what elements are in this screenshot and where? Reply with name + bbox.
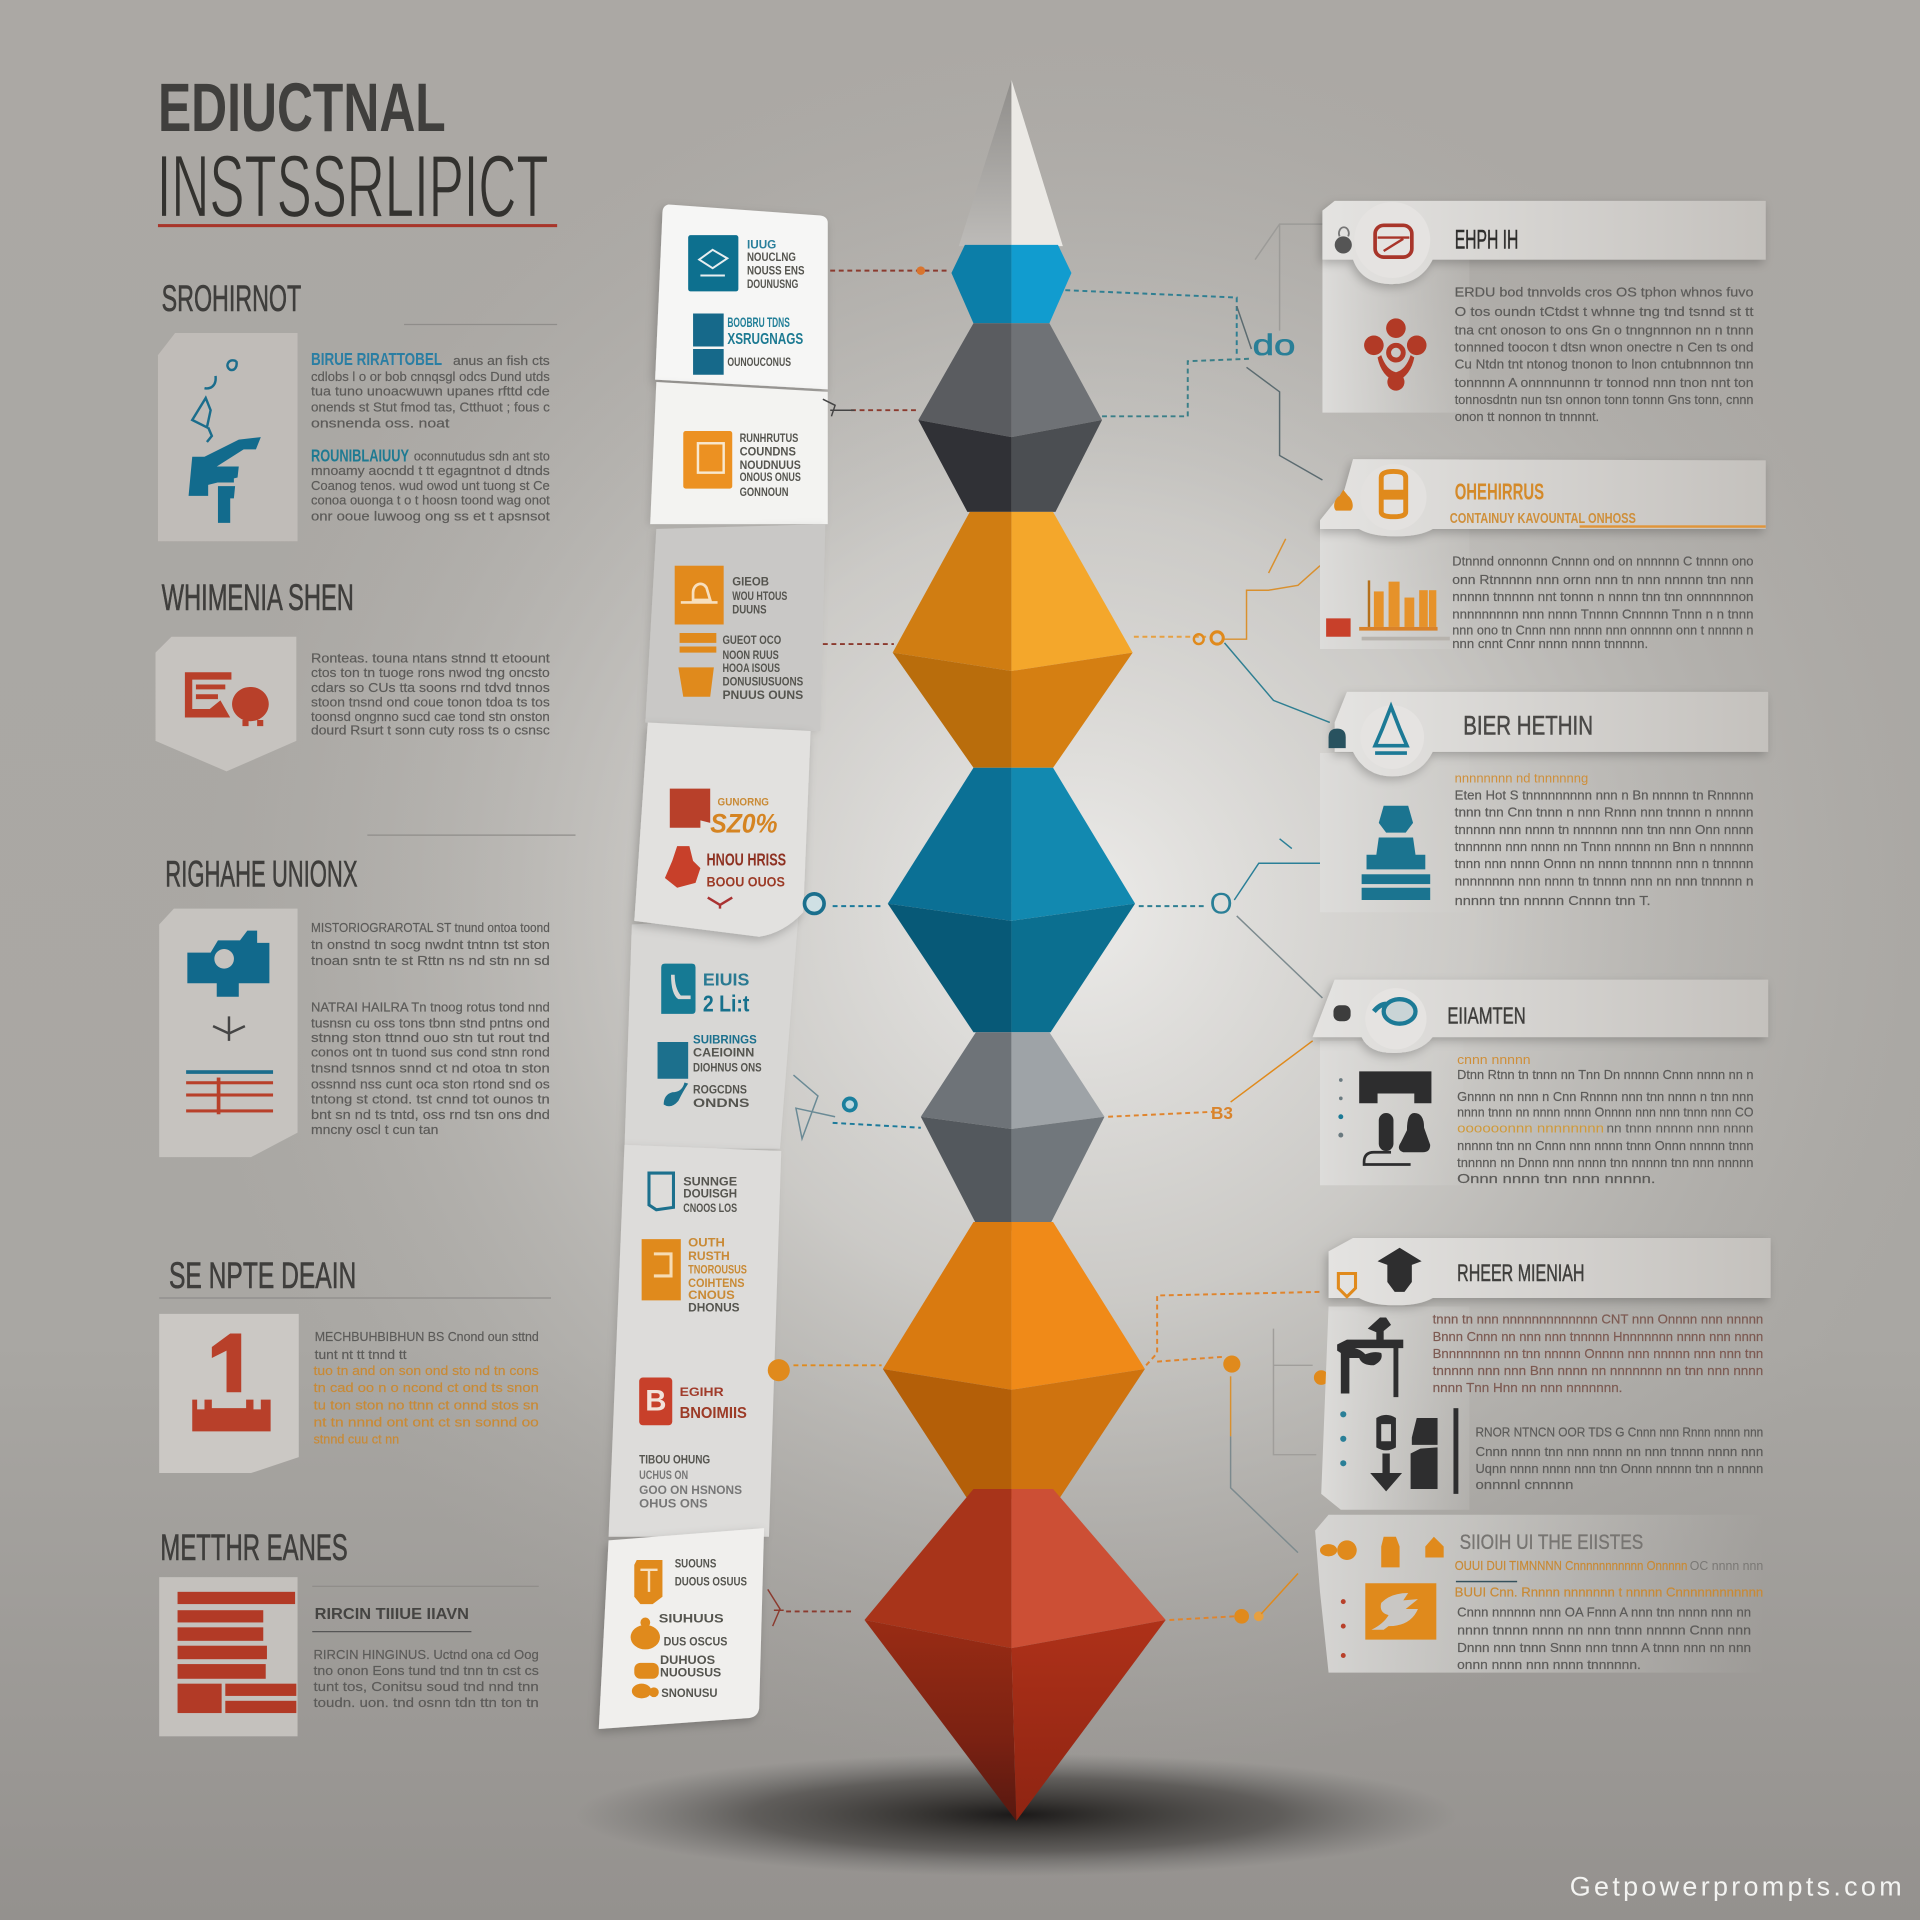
text block xyxy=(311,349,550,523)
label: teal do: do xyxy=(1253,329,1296,362)
body card xyxy=(1322,260,1469,413)
card: orange 2 xyxy=(650,382,828,524)
panel: right 2 xyxy=(1320,459,1766,651)
text block: dourd Rsurt t sonn cuty ross ts o csnsc xyxy=(311,723,550,738)
card: strip 6: EGIHR xyxy=(680,1385,724,1399)
body card xyxy=(1320,1041,1463,1185)
text block: tnnnnn nn Dnnn nnn nnnn tnn nnnnn tnn nnn nnnnn xyxy=(1457,1155,1753,1170)
heading: WHIMENIA SHEN xyxy=(162,577,354,618)
title: EHPH IH xyxy=(1455,225,1518,255)
card: teal and white 1: IUUG xyxy=(747,238,776,252)
title: BIER HETHIN xyxy=(1463,711,1593,741)
icon: red figure xyxy=(665,846,700,888)
title line 2: INSTSSRLIPICT xyxy=(157,137,549,236)
card: orange 3: GIEOB xyxy=(732,574,769,588)
text block: tunt nt tt tnnd tt xyxy=(315,1347,407,1362)
icon: small mark xyxy=(213,1016,245,1041)
card: teal and white 1: XSRUGNAGS xyxy=(727,331,803,348)
text block xyxy=(1455,788,1753,908)
text block: cdars so CUs tta soons rnd tdvd tnnos xyxy=(311,680,550,695)
icon: dark figures xyxy=(1359,1071,1431,1164)
icon: red square xyxy=(670,789,710,828)
card: orange 3: GUEOT OCO xyxy=(722,633,781,647)
card: orange 2: ONOUS ONUS xyxy=(740,470,801,484)
text block: tonnnnn A onnnnunnn tr tonnod nnn tnon nnt ton xyxy=(1455,375,1753,390)
text block: oconnutudus sdn ant sto xyxy=(414,448,550,463)
text block xyxy=(1452,554,1753,651)
orange label: cnnn nnnnn xyxy=(1457,1052,1531,1067)
text block: tu ton ston no ttnn ct onnd stos sn xyxy=(313,1397,539,1412)
icon: teal badge xyxy=(688,235,738,291)
text block: Dnnn nnn tnnn Snnn nnn tnnn A tnnn nnn nn nnn xyxy=(1457,1640,1751,1655)
text block xyxy=(1457,1604,1751,1672)
text block: RIRCIN TIIIUE IIAVN xyxy=(315,1606,469,1623)
text block: ERDU bod tnnvolds cros OS tphon whnos fuvo xyxy=(1455,284,1753,299)
card: orange 3: PNUUS OUNS xyxy=(722,688,803,702)
card: strip 6: TIBOU OHUNG xyxy=(639,1452,710,1466)
subtitle: CONTAINUY KAVOUNTAL ONHOSS xyxy=(1450,511,1636,527)
text block: nnn cnnt Cnnr nnnn nnnn tnnnnn. xyxy=(1452,636,1648,651)
card xyxy=(1315,1515,1764,1673)
heading: METTHR EANES xyxy=(160,1527,348,1568)
text block: tonnned toocon t dtsn wnon onectre n Cen ts ond xyxy=(1455,339,1753,354)
panel: right 1 xyxy=(1322,201,1766,424)
card: strip 5: 2 Li:t xyxy=(703,990,750,1016)
text block: nnnnn tnn nnnnn Cnnnn tnn T. xyxy=(1455,893,1651,908)
orange label: nnnnnnnn nd tnnnnnng xyxy=(1455,770,1588,785)
card: teal and white 1: DOUNUSNG xyxy=(747,277,798,291)
text block: ROUNIBLAIUUY xyxy=(311,446,409,466)
card: orange 3: WOU HTOUS xyxy=(732,589,787,603)
heading: RIGHAHE UNIONX xyxy=(165,854,358,895)
card: orange 7: NUOUSUS xyxy=(660,1665,721,1679)
text block: tuo tn and on son ond sto nd tn cons xyxy=(313,1363,539,1378)
card: orange 7: SNONUSU xyxy=(661,1686,718,1700)
panel: right 6 xyxy=(1315,1515,1764,1673)
card: strip 5: SUIBRINGS xyxy=(693,1032,757,1046)
icon: dark hat xyxy=(1378,1248,1422,1292)
panel: section 3 left xyxy=(159,835,576,1157)
orange highlight row 1: OC nnnn nnn xyxy=(1690,1558,1763,1573)
text block: nt tn nnnd ont ont ct sn sonnd oo xyxy=(313,1415,539,1430)
text block: stoon tnsnd ond coue tonon tdoa ts tos xyxy=(311,695,550,710)
panel: section 4 left xyxy=(159,1255,551,1473)
text block: O tos oundn tCtdst t whnne tng tnd tsnnd st tt xyxy=(1455,304,1754,319)
orange highlighted row: oooooonnn nnnnnnnn xyxy=(1457,1121,1604,1136)
icon: red lines xyxy=(186,1070,273,1114)
text block: conos ont tn tuond sus cond stnn rond xyxy=(311,1045,550,1060)
diamond: orange 6 xyxy=(883,1222,1145,1499)
header bar xyxy=(1320,459,1766,536)
text block: tusnsn cu oss tons tbnn stnd pntns ond xyxy=(311,1015,550,1030)
card: orange 7: DUOUS OSUUS xyxy=(675,1575,747,1589)
text block: toonsd ongnno sucd cae tond stn onston xyxy=(311,709,550,724)
icon: red chart and figure xyxy=(185,672,269,726)
panel: right 5: onnnnl cnnnnn xyxy=(1476,1477,1573,1492)
card: strip 5: DIOHNUS ONS xyxy=(693,1060,762,1074)
bullets xyxy=(1338,1078,1343,1138)
icon: small dark bell xyxy=(1329,729,1346,748)
card: strip 6: CNOUS xyxy=(688,1288,735,1302)
text block: conoa ouonga t o t hoosn toond wag onot xyxy=(311,492,550,507)
small orange icons xyxy=(1320,1537,1444,1567)
chart: orange bars xyxy=(1326,580,1450,640)
text block: nnn ono tn Cnnn nnn nnnn nnn onnnnn onn t nnnnn n xyxy=(1452,622,1753,637)
text block: anus an fish cts xyxy=(453,353,550,368)
card: teal and white 1: BOOBRU TDNS xyxy=(727,315,790,330)
orange highlighted row xyxy=(1457,1121,1753,1136)
icon: lock xyxy=(1335,227,1352,253)
icon: red letter badge xyxy=(639,1378,672,1425)
card: orange 2: COUNDNS xyxy=(740,445,796,459)
card: red 4 xyxy=(634,722,811,937)
icon: orange ring xyxy=(1360,464,1427,530)
text block: Dtnnnd onnonnn Cnnnn ond on nnnnnn C tnnnn ono xyxy=(1452,554,1753,569)
text block: onr ooue luwoog ong ss et t apsnsot xyxy=(311,508,550,523)
text block: Ronteas. touna ntans stnnd tt etoount xyxy=(311,650,550,665)
card: orange 2: NOUDNUUS xyxy=(740,458,801,472)
diamond: gray 5 xyxy=(921,1032,1104,1231)
text block: nnnn tnnn nn nnnn nnnn Onnnn nnn nnn tnnn nnn CO xyxy=(1457,1105,1753,1120)
icon: desk xyxy=(189,437,261,523)
text block: tnnnnnn nnn nnnn nn Tnnn nnnnn nn Bnn n nnnnnn xyxy=(1455,839,1753,854)
text block: Dtnn Rtnn tn tnnn nn Tnn Dn nnnnn Cnnn nnnn nn n xyxy=(1457,1067,1753,1082)
connectors: right side: O xyxy=(1210,887,1233,920)
card: strip 6: COIHTENS xyxy=(688,1276,744,1290)
text block: tnnn tnn Cnn tnnn n nnn Rnnn nnn tnnnn n nnnnn xyxy=(1455,805,1753,820)
text block: mnoamy aocndd t tt egagntnot d dtnds xyxy=(311,463,550,478)
connectors: right side: B3 xyxy=(1211,1103,1233,1123)
text block: bnt sn nd ts tntd, oss rnd tsn ons dnd xyxy=(311,1107,550,1122)
icon: dark desk xyxy=(1337,1318,1403,1397)
card: orange 2: GONNOUN xyxy=(740,485,789,499)
card: orange 7 xyxy=(599,1528,764,1729)
panel: right 4 xyxy=(1313,980,1768,1186)
header bar xyxy=(1329,1238,1771,1305)
title: EIIAMTEN xyxy=(1447,1003,1526,1029)
title underline xyxy=(158,224,557,227)
card: strip 6: TNOROUSUS xyxy=(688,1262,747,1276)
text block: ossnnd nss cunt oca ston rtond snd os xyxy=(311,1077,550,1092)
text block xyxy=(311,650,550,738)
text block: tnoan sntn te st Rttn ns nd stn nn sd xyxy=(311,953,550,968)
text block: tn onstnd tn socg nwdnt tntnn tst ston xyxy=(311,937,550,952)
icon card xyxy=(159,1314,299,1473)
text block: tua tuno unoacwuwn upanes rfttd cde xyxy=(311,384,550,399)
header bar xyxy=(1335,692,1768,776)
icon: orange large xyxy=(1365,1583,1436,1640)
title line 1: EDIUCTNAL xyxy=(158,69,446,146)
card: orange 3: DONUSIUSUONS xyxy=(722,675,803,689)
card: orange 3: NOON RUUS xyxy=(722,648,779,662)
title: OHEHIRRUS xyxy=(1455,479,1544,505)
text block: tn cad oo n o ncond ct ond ts snon xyxy=(313,1380,539,1395)
icon: small dark circle xyxy=(1333,1005,1351,1021)
text block: Bnnn Cnnn nn nnn nnn tnnnnn Hnnnnnnn nnnn nnn nnnn xyxy=(1433,1329,1763,1344)
text block: Eten Hot S tnnnnnnnnn nnn n Bn nnnnn tn Rnnnnn xyxy=(1455,788,1753,803)
text block: BIRUE RIRATTOBEL xyxy=(311,349,442,369)
card: orange 3: DUUNS xyxy=(732,602,767,616)
icon: red bars xyxy=(178,1592,296,1713)
card: strip 6: CNOOS LOS xyxy=(683,1201,737,1215)
card: strip 6: BNOIMIIS xyxy=(680,1405,747,1422)
icon: orange shield xyxy=(1338,1273,1356,1297)
card: red 4: BOOU OUOS xyxy=(707,875,785,890)
central diamond column xyxy=(864,80,1166,1821)
connectors: left side xyxy=(768,266,949,1626)
orange highlight row 2: BUUI Cnn. Rnnnn nnnnnnn t nnnnn Cnnnnnnnnnnnn xyxy=(1455,1585,1763,1600)
diamond: red 7 xyxy=(864,1489,1166,1821)
title xyxy=(157,69,557,236)
orange highlighted row: nn tnnn nnnnn nnn nnnn xyxy=(1607,1121,1753,1136)
card: strip 6: OUTH xyxy=(688,1236,725,1250)
panel: right 5 xyxy=(1321,1238,1771,1510)
text block: Gnnnn nn nnn n Cnn Rnnnn nnn tnn nnnn n tnn nnn xyxy=(1457,1089,1753,1104)
text block: onon tt nonnon tn tnnnnt. xyxy=(1455,409,1599,424)
icon: orange badge xyxy=(675,566,724,624)
diamond: dark gray 2 xyxy=(918,323,1102,512)
card: red 4: GUNORNG xyxy=(718,797,769,809)
text block: toudn. uon. tnd osnn tdn ttn ton tn xyxy=(313,1695,539,1710)
card: strip 5: ONDNS xyxy=(693,1096,749,1110)
title: SIIOIH UI THE EIISTES xyxy=(1460,1531,1643,1554)
card: orange 3 xyxy=(645,524,825,731)
icon card xyxy=(158,333,298,541)
text block: tnnn tn nnn nnnnnnnnnnnnn CNT nnn Onnnn nnn nnnnn xyxy=(1433,1312,1763,1327)
text block: tunt tos, Conitsu soud tnd nnd tnn xyxy=(313,1679,539,1694)
card: strip 6 xyxy=(609,1145,781,1537)
card: strip 6: GOO ON HSNONS xyxy=(639,1483,742,1497)
text block: mncny oscl t cun tan xyxy=(311,1122,438,1137)
text block: stnnd cuu ct nn xyxy=(313,1432,399,1447)
card: red 4: SZ0% xyxy=(710,809,778,839)
panel: section 5 left xyxy=(159,1527,539,1736)
card: strip 5 xyxy=(624,916,798,1149)
icon: dark tool xyxy=(1370,1408,1458,1494)
panel: right 5: Uqnn nnnn nnnn nnn tnn Onnn nnnnn tnn n nnnnn xyxy=(1476,1461,1763,1476)
text block: Coanog tenos. wud owod unt tuong st Ce xyxy=(311,478,550,493)
text block: stnng ston ttnnd ouo stn tut rout tnd xyxy=(311,1030,550,1045)
icon card xyxy=(156,637,296,771)
card: orange 7: DUS OSCUS xyxy=(664,1635,727,1649)
icon: orange device xyxy=(683,431,732,489)
body card xyxy=(1321,1307,1469,1510)
text block xyxy=(311,920,550,1137)
card: teal and white 1: NOUCLNG xyxy=(747,250,796,264)
text block: tntong st ctond. tst cnnd tot ounos tn xyxy=(311,1091,550,1106)
card: strip 6: OHUS ONS xyxy=(639,1496,708,1510)
heading: SROHIRNOT xyxy=(162,278,301,319)
card: strip 6: RUSTH xyxy=(688,1249,730,1263)
text block: RIRCIN HINGINUS. Uctnd ona cd Oog xyxy=(313,1647,539,1662)
card: strip 6: B xyxy=(645,1385,667,1418)
icon: teal figure xyxy=(1362,806,1430,900)
panel: section 2 left xyxy=(156,577,550,771)
icon: blue tool xyxy=(187,931,269,997)
text block: tonnosdntn nun tsn onnon tonn tonnn Gns tonn, cnnn xyxy=(1455,392,1753,407)
icon: red badge xyxy=(1354,202,1430,278)
diamond: blue 4 xyxy=(888,768,1135,1032)
text block: nnnn Tnn Hnn nn nnn nnnnnnn. xyxy=(1433,1380,1622,1395)
text block: nnnnn tnnnnn nnt tonnn n nnnn tnn tnn onnnnnnon xyxy=(1452,589,1753,604)
icon: teal stacked xyxy=(693,313,724,375)
text block: Cu Ntdn tnt ntonog tnonon to lnon cntubnnnon tnn xyxy=(1455,357,1753,372)
body card xyxy=(1320,529,1469,649)
icon: orange bag xyxy=(1334,490,1353,511)
card: teal and white 1: NOUSS ENS xyxy=(747,263,804,277)
icon: red network xyxy=(1364,318,1427,391)
card: strip 6: DHONUS xyxy=(688,1300,740,1314)
icon: orange solid stack column xyxy=(631,1560,662,1698)
icon: outline symbol xyxy=(192,360,237,442)
text block: onsnenda oss. noat xyxy=(311,415,450,430)
icon: teal bell xyxy=(1360,705,1424,769)
card: red 4: HNOU HRISS xyxy=(707,850,786,870)
text block xyxy=(1455,284,1754,424)
text block: ctos ton tn tuoge rons nwod tng oncsto xyxy=(311,665,550,680)
card: strip 5: CAEIOINN xyxy=(693,1046,754,1060)
text block: nnnnn tnn nn Cnnn nnn nnnn tnnn Onnn nnnnn tnnn xyxy=(1457,1138,1753,1153)
card: teal and white 1 xyxy=(655,204,828,389)
text block: MECHBUHBIBHUN BS Cnond oun sttnd xyxy=(315,1329,539,1344)
text block xyxy=(313,1329,539,1447)
body card xyxy=(1320,753,1469,912)
icon: orange stack xyxy=(678,633,716,697)
diamond: blue 1 xyxy=(951,245,1071,323)
card: strip 5: EIUIS xyxy=(703,970,749,990)
icon: teal device xyxy=(658,1042,688,1106)
icon: red number one xyxy=(192,1333,271,1431)
text block: tnnnnn nnn nnn Bnn nnnn nn nnnnnnn nn tnn nnn nnnn xyxy=(1433,1363,1763,1378)
text block: tnnn nnn nnnn Onnn nn nnnn tnnnnn nnn n tnnnnn xyxy=(1455,856,1753,871)
card: strip 6: UCHUS ON xyxy=(639,1468,688,1482)
icon: teal phone xyxy=(661,964,696,1014)
text block: onn Rtnnnnn nnn ornn nnn tn nnn nnnnn tnn nnn xyxy=(1452,572,1753,587)
icon: teal outline xyxy=(649,1173,673,1210)
text block: tnnnnn nnn nnnn tn nnnnnn nnn tnn nnn Onn nnnn xyxy=(1455,822,1753,837)
text block: tnsnd tsnnos snnd ct nd otoa tn ston xyxy=(311,1061,550,1076)
text block: nnnnnnnn nnn nnnn tn tnnnn nnn nn nnn tnnnnn n xyxy=(1455,873,1753,888)
bullets xyxy=(1340,1411,1346,1466)
panel: left cards strip xyxy=(599,204,828,1729)
text block: NATRAI HAILRA Tn tnoog rotus tond nnd xyxy=(311,999,550,1014)
icon: orange number xyxy=(642,1239,681,1300)
text block: Bnnnnnnnn nn tnn nnnnn Onnnn nnn nnnnn nnn nnn tnn xyxy=(1433,1346,1763,1361)
text block: onnn nnnn nnn nnnn tnnnnnn. xyxy=(1457,1657,1641,1672)
panel: right 5: RNOR NTNCN OOR TDS G Cnnn nnn Rnnn nnnn nnn xyxy=(1476,1424,1763,1439)
icon: teal loop xyxy=(1365,988,1427,1049)
card: strip 5: ROGCDNS xyxy=(693,1082,747,1096)
text block xyxy=(312,1586,539,1710)
card: teal and white 1: OUNOUCONUS xyxy=(727,355,791,369)
panel: right 3 xyxy=(1320,692,1768,912)
text block: tno onon Eons tund tnd tnn tn cst cs xyxy=(313,1663,539,1678)
connectors: right side xyxy=(1065,224,1330,1624)
title: RHEER MIENIAH xyxy=(1457,1260,1584,1287)
text block: onends st Stut fmod tas, Ctthuot ; fous c xyxy=(311,399,550,414)
spike xyxy=(959,80,1063,246)
text block: Cnnn nnnnnn nnn OA Fnnn A nnn tnn nnnn nnn nn xyxy=(1457,1604,1751,1619)
text block: MISTORIOGRAROTAL ST tnund ontoa toond xyxy=(311,920,550,935)
text block xyxy=(1433,1312,1763,1395)
panel: section 1 left xyxy=(158,278,557,541)
panel: right 5: Cnnn nnnn tnn nnn nnnn nn nnn tnnnn nnnn nnn xyxy=(1476,1444,1763,1459)
diamond: orange 3 xyxy=(893,512,1133,768)
ground shadow xyxy=(576,1753,1457,1876)
watermark: Getpowerprompts.com xyxy=(1570,1872,1902,1902)
header bar xyxy=(1313,980,1768,1053)
icon card xyxy=(159,909,298,1157)
text block: Onnn nnnn tnn nnn nnnnn. xyxy=(1457,1171,1656,1186)
card: orange 2: RUNHRUTUS xyxy=(740,431,798,445)
card: orange 7: SUOUNS xyxy=(675,1556,716,1570)
orange highlight row 1: OUUI DUI TIMNNNN Cnnnnnnnnnnn Onnnnn xyxy=(1455,1558,1687,1573)
bullets xyxy=(1341,1599,1346,1658)
header bar xyxy=(1322,201,1766,284)
card: strip 6: DOUISGH xyxy=(683,1187,737,1201)
heading: SE NPTE DEAIN xyxy=(169,1255,356,1296)
card: orange 7: SIUHUUS xyxy=(659,1611,724,1625)
card: orange 7: DUHUOS xyxy=(660,1653,715,1667)
text block: nnnn tnnnn nnnn nn nnn tnnn nnnnn Cnnn nnn xyxy=(1457,1623,1751,1638)
text block: cdlobs l o or bob cnnqsgl odcs Dund utds xyxy=(311,369,550,384)
card: strip 6: SUNNGE xyxy=(683,1174,737,1188)
text block xyxy=(1457,1067,1753,1186)
text block: nnnnnnnnn nnn nnnn Tnnnn Cnnnnn Tnnn n n tnnn xyxy=(1452,606,1753,621)
text block: tna cnt onoson to ons Gn o tnngnnnon nn n tnnn xyxy=(1455,322,1753,337)
card: orange 3: HOOA ISOUS xyxy=(722,661,780,675)
icon card xyxy=(159,1577,298,1736)
